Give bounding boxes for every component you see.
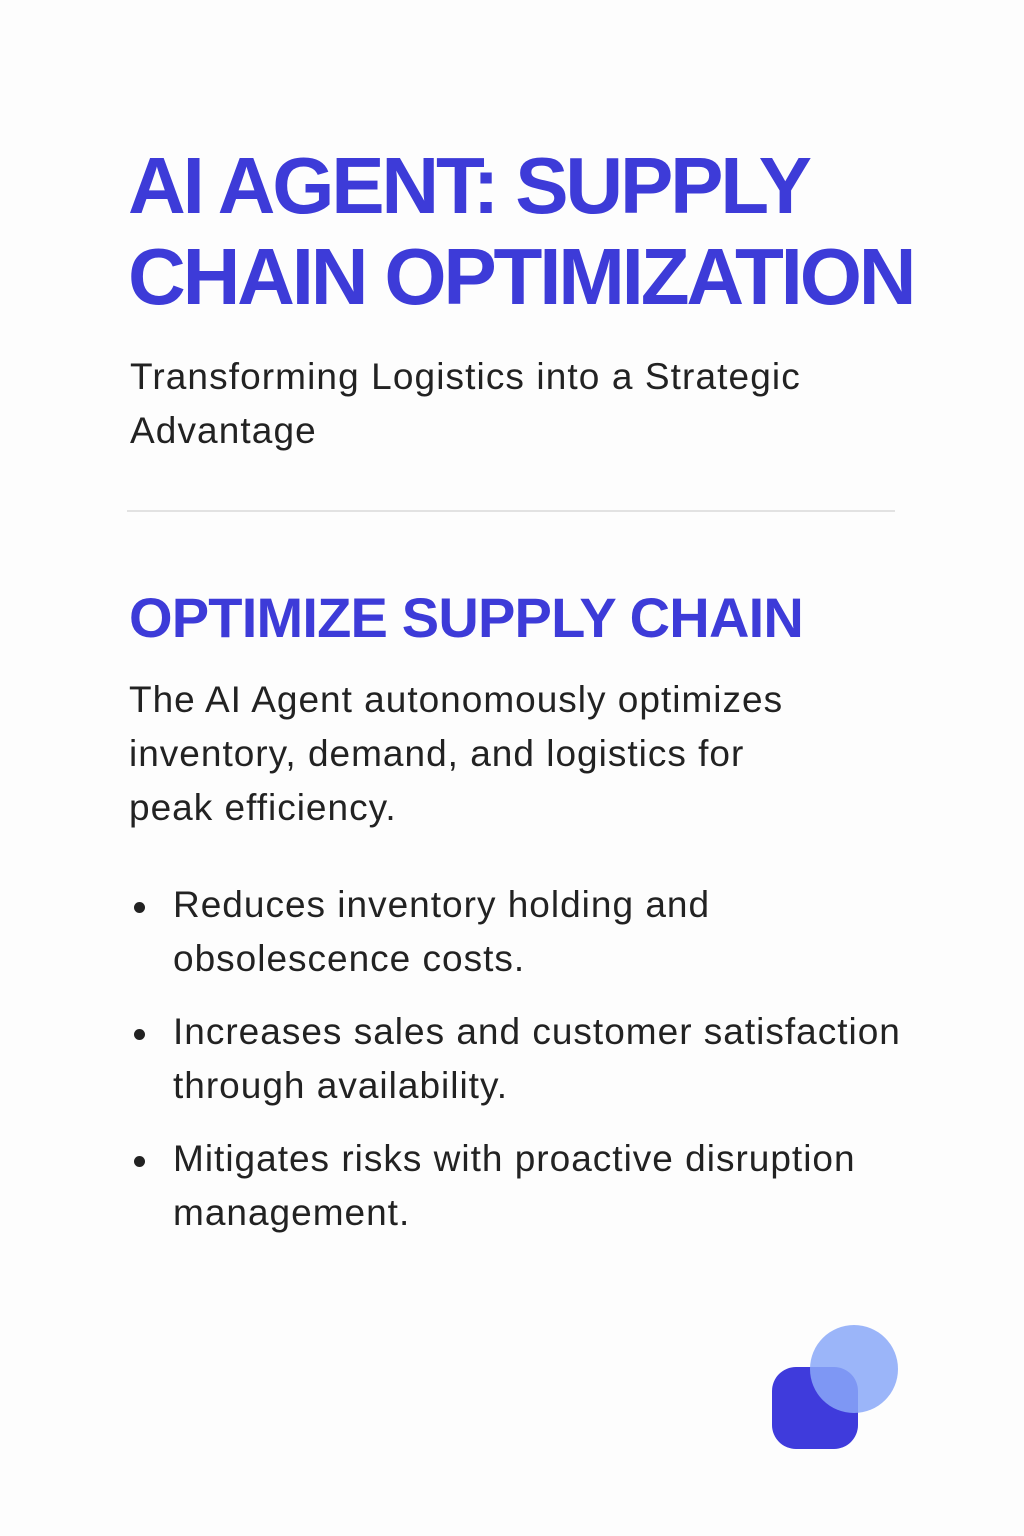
subtitle xyxy=(130,356,801,451)
section heading: OPTIMIZE SUPPLY CHAIN xyxy=(129,586,803,649)
subtitle: Transforming Logistics into a Strategic xyxy=(130,356,801,397)
description text: peak efficiency. xyxy=(129,787,397,828)
title: AI AGENT: SUPPLY xyxy=(128,141,809,230)
description text xyxy=(129,679,783,828)
bullet list: through availability. xyxy=(173,1065,508,1106)
subtitle: Advantage xyxy=(130,410,317,451)
bullet list: Increases sales and customer satisfaction xyxy=(173,1011,901,1052)
bullet list: Mitigates risks with proactive disruption xyxy=(173,1138,856,1179)
icon: logo shapes xyxy=(772,1325,898,1449)
bullet list: management. xyxy=(173,1192,410,1233)
bullet list: obsolescence costs. xyxy=(173,938,525,979)
title: CHAIN OPTIMIZATION xyxy=(128,232,913,321)
description text: The AI Agent autonomously optimizes xyxy=(129,679,783,720)
bullet list: Reduces inventory holding and xyxy=(173,884,710,925)
bullet list xyxy=(134,884,901,1233)
description text: inventory, demand, and logistics for xyxy=(129,733,744,774)
title xyxy=(128,141,913,321)
